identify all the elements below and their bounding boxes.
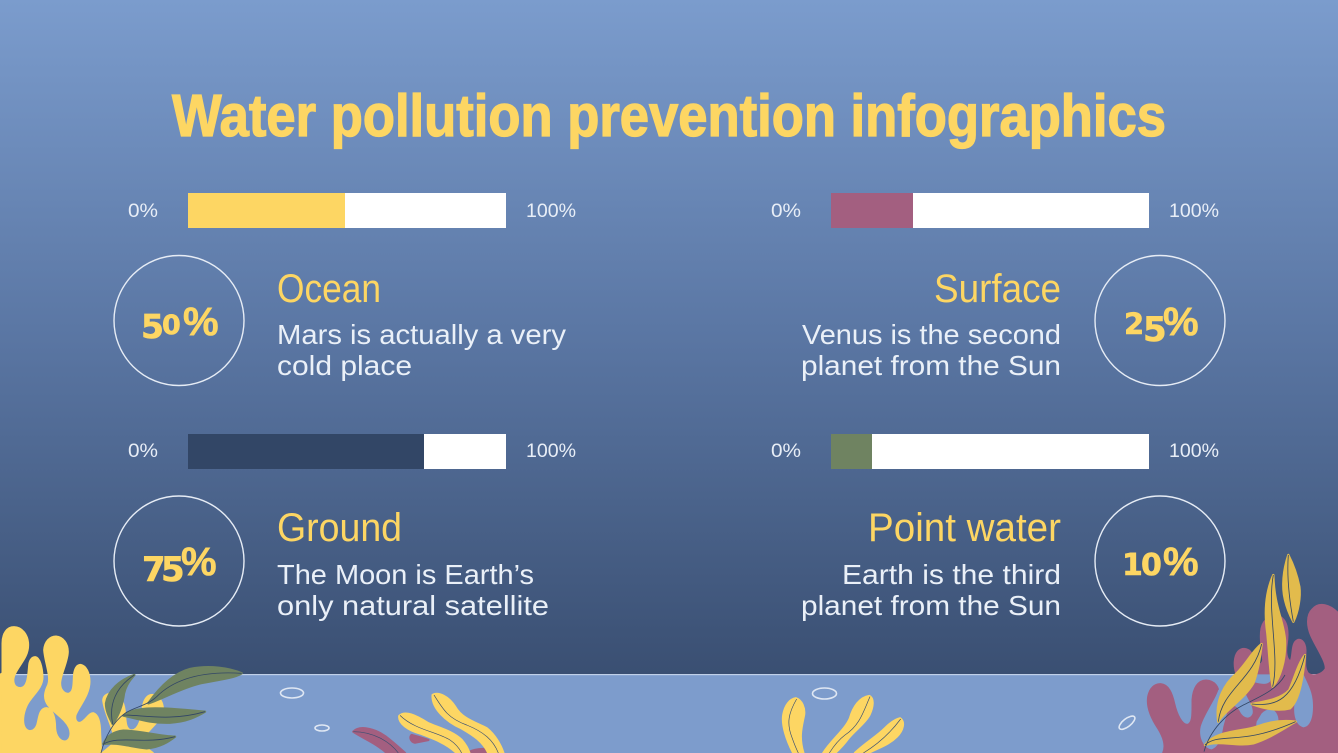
coral hole: right	[1294, 674, 1313, 727]
leaf: green middle	[123, 708, 205, 723]
description: surface: planet from the Sun	[801, 350, 1061, 381]
leaf: gold top	[1283, 555, 1300, 622]
leaf: gold bottom	[1205, 721, 1296, 745]
percent circle: 75%: %	[181, 540, 217, 584]
percent circle: 75%	[114, 496, 244, 626]
percent circle: 25%: 2	[1124, 307, 1144, 341]
panel: point water	[771, 434, 1225, 626]
percent circle: 25%: 5	[1143, 310, 1167, 350]
heading: Surface: Surface	[934, 267, 1061, 311]
progress bar: point water 10%: 100%	[1169, 441, 1219, 462]
progress bar: point water 10%	[771, 434, 1219, 469]
description: point water: Earth is the third	[842, 559, 1061, 590]
percent circle: 50%: 5	[141, 307, 164, 346]
heading: Ocean: Ocean	[277, 267, 381, 311]
bubble: middle	[812, 688, 836, 699]
water band	[0, 674, 1338, 753]
percent circle: 75%: 7	[142, 550, 166, 590]
progress bar: surface 25%	[771, 193, 1219, 228]
leaf: gold left	[1218, 644, 1262, 722]
heading: Ground: Ground	[277, 506, 402, 550]
leaf: green top	[148, 667, 242, 703]
leaf veins and stem	[1204, 555, 1305, 752]
leaf: green lower	[103, 731, 175, 748]
percent circle: 75%: 5	[161, 550, 185, 590]
description: ground: The Moon is Earth’s	[277, 559, 534, 590]
description: ocean: cold place	[277, 350, 412, 381]
progress bar: surface 25%: 0%	[771, 201, 801, 222]
panel: ocean	[114, 193, 576, 386]
percent circle: 10%: 1	[1122, 548, 1143, 583]
percent circle: 25%	[1095, 256, 1225, 386]
leaf: green upper left	[106, 675, 134, 724]
leaf: gold tall	[1266, 575, 1285, 687]
description: point water	[801, 559, 1061, 621]
coral hole: middle	[1256, 709, 1278, 739]
illustration: pink coral and golden leaves	[1148, 555, 1338, 753]
percent circle: 50%: 0	[162, 310, 181, 341]
illustration: yellow coral and green leaves	[0, 627, 242, 753]
percent circle: 10%	[1095, 496, 1225, 626]
percent circle: 10%: 0	[1141, 548, 1162, 583]
seaweed: yellow middle	[783, 696, 903, 753]
progress bar: ground 75%	[128, 434, 576, 469]
panel: ground	[114, 434, 576, 626]
description: ground	[277, 559, 549, 621]
percent circle: 50%: %	[183, 300, 219, 344]
description: ocean: Mars is actually a very	[277, 319, 566, 350]
percent circle: 50%	[114, 256, 244, 386]
percent circle: 25%: %	[1163, 300, 1199, 344]
bubble: left small	[315, 725, 329, 731]
description: ground: only natural satellite	[277, 590, 549, 621]
progress bar: point water 10%: 0%	[771, 441, 801, 462]
leaf stem and veins	[101, 673, 242, 753]
percent circle: 10%: %	[1163, 540, 1199, 584]
leaf: gold right	[1252, 655, 1305, 710]
bubble: left large	[280, 688, 304, 698]
coral hole: left	[1200, 674, 1272, 749]
panel: surface	[771, 193, 1225, 386]
bubble: right	[1117, 714, 1137, 732]
description: surface: Venus is the second	[802, 319, 1061, 350]
heading: Point water: Point water	[868, 506, 1061, 550]
progress bar: ground 75%: 0%	[128, 441, 158, 462]
description: surface	[801, 319, 1061, 381]
progress bar: ocean 50%: 0%	[128, 201, 158, 222]
progress bar: ground 75%: 100%	[526, 441, 576, 462]
progress bar: ocean 50%: 100%	[526, 201, 576, 222]
progress bar: ocean 50%	[128, 193, 576, 228]
title: Water pollution prevention infographics	[172, 83, 1166, 149]
seaweed: pink and yellow left	[353, 694, 503, 753]
progress bar: surface 25%: 100%	[1169, 201, 1219, 222]
description: ocean	[277, 319, 566, 381]
description: point water: planet from the Sun	[801, 590, 1061, 621]
